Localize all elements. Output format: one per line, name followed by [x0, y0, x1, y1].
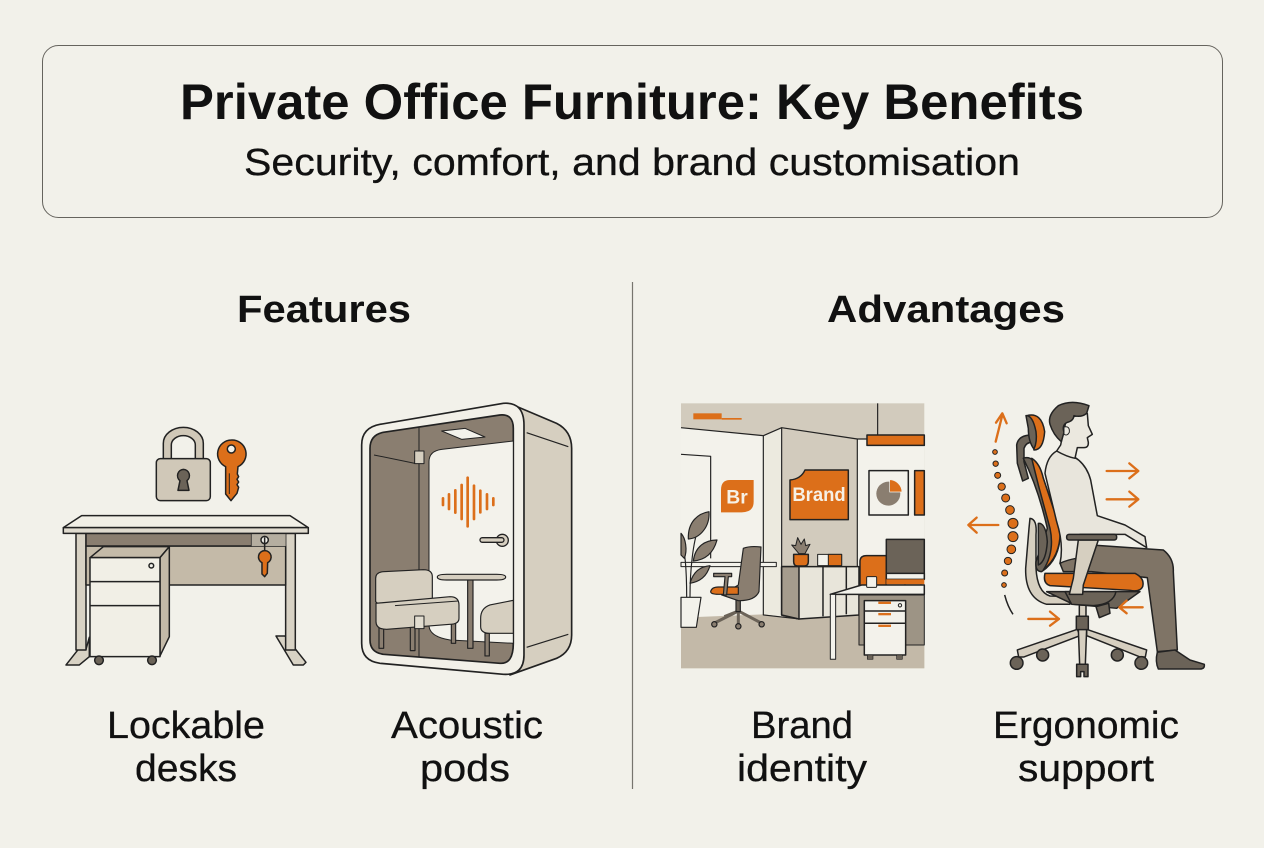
- label: Ergonomic support: support: [1018, 748, 1154, 790]
- armchairs: [376, 570, 513, 656]
- door handle: [480, 534, 508, 546]
- shelf and cabinets: [681, 538, 859, 619]
- desk pedestal: [864, 601, 906, 659]
- title: Private Office Furniture: Key Benefits: [180, 74, 1084, 130]
- desk top: [63, 516, 308, 533]
- small orange key: [258, 551, 271, 577]
- icon: padlock: [156, 427, 210, 501]
- table: [437, 574, 506, 648]
- ceiling light: [867, 435, 924, 445]
- headrest and back: [1017, 415, 1060, 572]
- illustration: ergonomic chair and sitter: [968, 402, 1204, 677]
- label: Acoustic pods: Acoustic: [391, 705, 543, 747]
- pedestal drawers: [90, 547, 169, 665]
- wall lines: [681, 403, 924, 619]
- logo badge Br: Br: [726, 488, 748, 509]
- person shoe: [1156, 650, 1204, 669]
- label: Acoustic pods: pods: [420, 748, 510, 790]
- desk modesty panel and drawer: [86, 533, 286, 585]
- framed pie chart: [869, 471, 924, 515]
- spine dots: [993, 450, 1018, 587]
- office chair: [711, 547, 764, 629]
- label: Lockable desks: desks: [135, 748, 237, 790]
- label: Acoustic pods: [391, 705, 543, 790]
- desk with orange partition and monitor: [830, 539, 924, 659]
- label: Ergonomic support: Ergonomic: [993, 705, 1179, 747]
- label: Brand identity: identity: [737, 748, 867, 790]
- icon: lockable desk with padlock and key: [63, 427, 308, 665]
- pod side wall: [510, 404, 572, 675]
- sound wave: [443, 478, 493, 526]
- pod interior: [370, 415, 513, 663]
- brand sign: [790, 470, 848, 520]
- plant: [681, 512, 717, 627]
- heading: Advantages: Advantages: [827, 289, 1065, 331]
- label: Lockable desks: Lockable: [107, 705, 265, 747]
- orange arrows: [968, 413, 1143, 626]
- label: Lockable desks: [107, 705, 265, 790]
- logo badge Br: [721, 480, 754, 512]
- label: Brand identity: Brand: [751, 705, 853, 747]
- title panel: [42, 46, 1222, 218]
- orange ceiling sign: [693, 413, 742, 420]
- desk legs: [66, 533, 306, 665]
- seat cushion: [1044, 573, 1143, 618]
- label: Ergonomic support: [993, 705, 1179, 790]
- chair rear frame: [1026, 518, 1070, 604]
- person legs: [1060, 545, 1177, 652]
- room walls and floor: [681, 403, 924, 668]
- pod door: [374, 428, 513, 657]
- pod front frame: [362, 403, 524, 674]
- icon: acoustic pod: [362, 403, 572, 675]
- brand sign: Brand: [792, 485, 846, 506]
- spine curve: [1005, 595, 1013, 614]
- chair base: [1010, 605, 1148, 677]
- person head: [1049, 402, 1092, 458]
- armrest: [1067, 534, 1117, 594]
- person torso: [1045, 451, 1147, 563]
- label: Brand identity: [737, 705, 867, 790]
- icon: orange key: [218, 440, 246, 501]
- subtitle: Security, comfort, and brand customisation: [244, 142, 1020, 184]
- heading: Features: Features: [237, 289, 411, 331]
- illustration: branded office: [681, 403, 924, 668]
